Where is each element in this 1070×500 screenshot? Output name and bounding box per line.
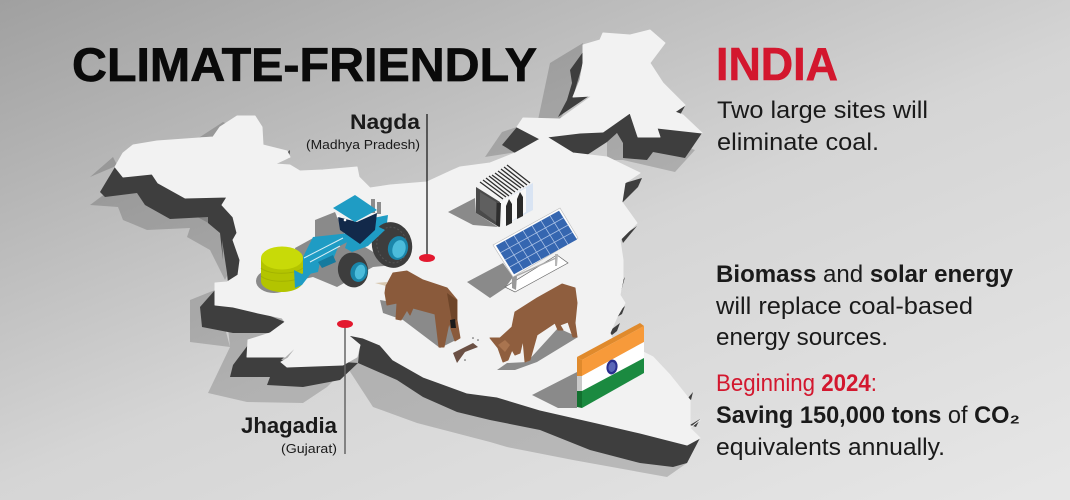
intro text: eliminate coal. [717,129,879,156]
savings text block: Beginning 2024: [716,370,877,397]
energy text block: energy sources. [716,324,888,351]
heading: India: INDIA [716,38,838,90]
map top surface [115,30,702,445]
label: Jhagadia: (Gujarat) [281,441,337,456]
icon: cow grazing [490,284,578,370]
energy text block: Biomass and solar energy [716,261,1014,288]
marker: Nagda [419,114,435,262]
savings text block: Saving 150,000 tons of CO₂ [716,402,1020,429]
savings text block [716,370,1020,461]
rear wheel [367,218,417,272]
intro text [717,97,928,156]
icon: Indian flag [532,323,644,408]
map of India [90,30,702,477]
title: CLIMATE-FRIENDLY [72,38,537,91]
intro text: Two large sites will [717,97,928,124]
label: Nagda: Nagda [350,111,420,134]
exhausts [373,199,379,214]
label: Jhagadia [241,413,338,456]
energy text block [715,261,1014,351]
tractor shadow [295,212,395,287]
icon: tractor with biomass bale [256,195,417,293]
biomass bale [261,246,303,292]
icon: cow standing [375,271,460,348]
marker: Jhagadia [337,320,353,454]
icon: dung [453,337,479,363]
savings text block: equivalents annually. [716,434,945,461]
icon: building [448,165,533,227]
icon: solar panel [467,208,578,298]
label: Nagda: (Madhya Pradesh) [306,137,420,152]
tractor body [295,233,353,275]
map side walls [100,43,702,467]
label: Jhagadia: Jhagadia [241,413,338,438]
rear fender [373,215,388,238]
front wheel [335,250,371,290]
label: Nagda [306,111,420,152]
map cast shadow [90,43,700,477]
cab [345,225,385,252]
energy text block: will replace coal-based [715,293,973,320]
